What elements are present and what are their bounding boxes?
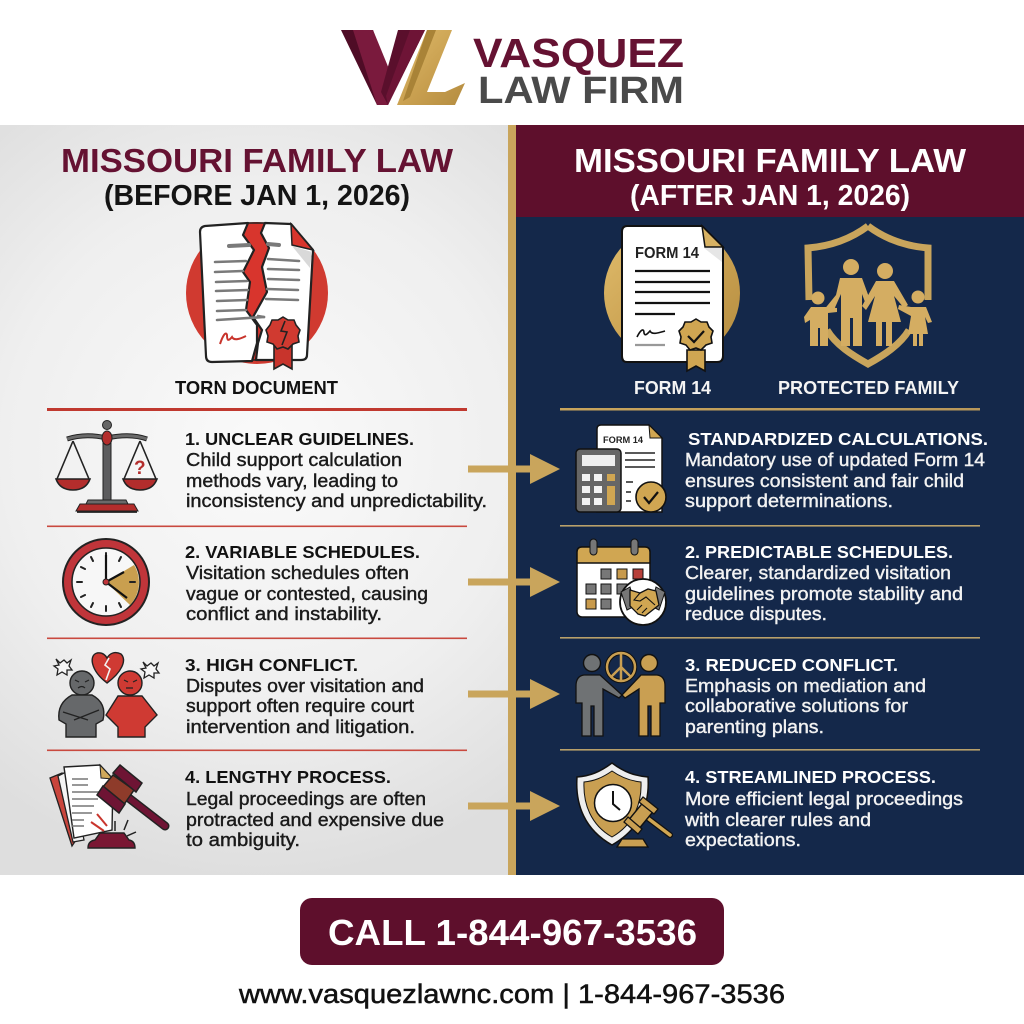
text: reduced conflict: Emphasis on mediation and: [685, 676, 926, 696]
text: high conflict: [185, 655, 424, 737]
row: lengthy process: [50, 765, 444, 850]
row: unclear guidelines: [56, 420, 487, 512]
text: high conflict: Disputes over visitation and: [186, 676, 424, 696]
heading: before: (BEFORE JAN 1, 2026): [104, 180, 410, 212]
logo wordmark: [473, 30, 684, 112]
arrow: lengthy to streamlined: [468, 791, 560, 821]
label: protected family: PROTECTED FAMILY: [778, 378, 959, 398]
icon: gavel and papers: [50, 765, 165, 848]
text: standardized calculations: Mandatory use of updated Form 14: [685, 450, 985, 470]
text: standardized calculations: [685, 429, 988, 511]
panel: after Jan 1, 2026: [516, 125, 1024, 875]
text: streamlined process: More efficient legal proceedings: [685, 789, 963, 809]
text: reduced conflict: parenting plans.: [685, 717, 824, 737]
text: high conflict: support often require court: [186, 696, 414, 716]
logo mark: VL monogram: [341, 30, 465, 105]
text: predictable schedules: reduce disputes.: [685, 604, 827, 624]
text: variable schedules: conflict and instability.: [186, 604, 382, 624]
arrow: high to reduced conflict: [468, 679, 560, 709]
text: predictable schedules: guidelines promote stability and: [685, 584, 963, 604]
text: predictable schedules: [685, 542, 963, 624]
text: reduced conflict: collaborative solutions for: [685, 696, 908, 716]
text: variable schedules: [185, 542, 428, 624]
icon: unbalanced scales: [56, 420, 157, 512]
arrow: variable to predictable: [468, 567, 560, 597]
text: streamlined process: with clearer rules and: [684, 810, 871, 830]
icon: arguing couple with broken heart: [54, 653, 159, 737]
icon: calendar with handshake: [577, 539, 666, 625]
logo wordmark: LAW FIRM: [478, 70, 684, 112]
icon: protected family shield: [804, 226, 932, 364]
footer: website and phone: www.vasquezlawnc.com | 1-844-967-3536: [238, 979, 785, 1009]
text: variable schedules: vague or contested, causing: [186, 584, 428, 604]
icon: Form 14 document: [604, 225, 740, 371]
icon: shield with clock and gavel: [577, 763, 670, 847]
heading: before: MISSOURI FAMILY LAW: [61, 142, 454, 179]
text: unclear guidelines: [185, 429, 487, 511]
heading: after: MISSOURI FAMILY LAW: [574, 142, 967, 179]
text: high conflict: intervention and litigation.: [186, 717, 415, 737]
text: standardized calculations: ensures consistent and fair child: [685, 471, 964, 491]
text: variable schedules: Visitation schedules often: [186, 563, 409, 583]
text: unclear guidelines: inconsistency and unpredictability.: [186, 491, 487, 511]
heading: after: [516, 125, 1024, 217]
heading: after: (AFTER JAN 1, 2026): [630, 180, 910, 212]
icon: clock: [63, 539, 149, 625]
text: unclear guidelines: 1. UNCLEAR GUIDELINES.: [185, 429, 414, 449]
icon: two people with peace sign: [576, 653, 665, 736]
row: variable schedules: [63, 539, 428, 625]
row: reduced conflict: [576, 653, 926, 737]
row: streamlined process: [577, 763, 963, 850]
label: Form 14: FORM 14: [634, 378, 711, 398]
text: unclear guidelines: methods vary, leading to: [186, 471, 398, 491]
text: reduced conflict: [685, 655, 926, 737]
text: lengthy process: 4. LENGTHY PROCESS.: [185, 767, 391, 787]
row: standardized calculations: [576, 425, 988, 512]
divider: center gold bar: [508, 125, 516, 875]
text: reduced conflict: 3. REDUCED CONFLICT.: [685, 655, 898, 675]
panel: before Jan 1, 2026: [0, 125, 508, 875]
heading: before: [61, 142, 454, 212]
text: streamlined process: [684, 767, 963, 850]
icon: calculator and Form 14: FORM 14: [603, 435, 643, 445]
logo: Vasquez Law Firm: [341, 30, 684, 112]
text: standardized calculations: support determinations.: [685, 491, 893, 511]
text: streamlined process: 4. STREAMLINED PROCESS.: [685, 767, 936, 787]
text: unclear guidelines: Child support calculation: [186, 450, 402, 470]
text: standardized calculations: STANDARDIZED CALCULATIONS.: [688, 429, 988, 449]
text: lengthy process: protracted and expensive due: [186, 810, 444, 830]
icon: calculator and Form 14: [576, 425, 666, 512]
icon: Form 14 document: FORM 14: [635, 245, 699, 262]
text: lengthy process: Legal proceedings are often: [186, 789, 426, 809]
logo wordmark: VASQUEZ: [473, 30, 684, 76]
call to action button: [300, 898, 724, 965]
row: high conflict: [54, 653, 424, 737]
text: variable schedules: 2. VARIABLE SCHEDULES.: [185, 542, 420, 562]
text: lengthy process: to ambiguity.: [186, 830, 300, 850]
arrow: unclear to standardized: [468, 454, 560, 484]
row: predictable schedules: [577, 539, 963, 625]
call to action button: CALL 1-844-967-3536: [328, 912, 697, 953]
text: predictable schedules: Clearer, standardized visitation: [685, 563, 951, 583]
label: torn document: TORN DOCUMENT: [175, 378, 338, 398]
text: lengthy process: [185, 767, 444, 850]
icon: torn document: [186, 222, 328, 369]
text: streamlined process: expectations.: [685, 830, 801, 850]
icon: unbalanced scales: ?: [134, 458, 146, 479]
text: predictable schedules: 2. PREDICTABLE SCHEDULES.: [685, 542, 953, 562]
text: high conflict: 3. HIGH CONFLICT.: [185, 655, 358, 675]
